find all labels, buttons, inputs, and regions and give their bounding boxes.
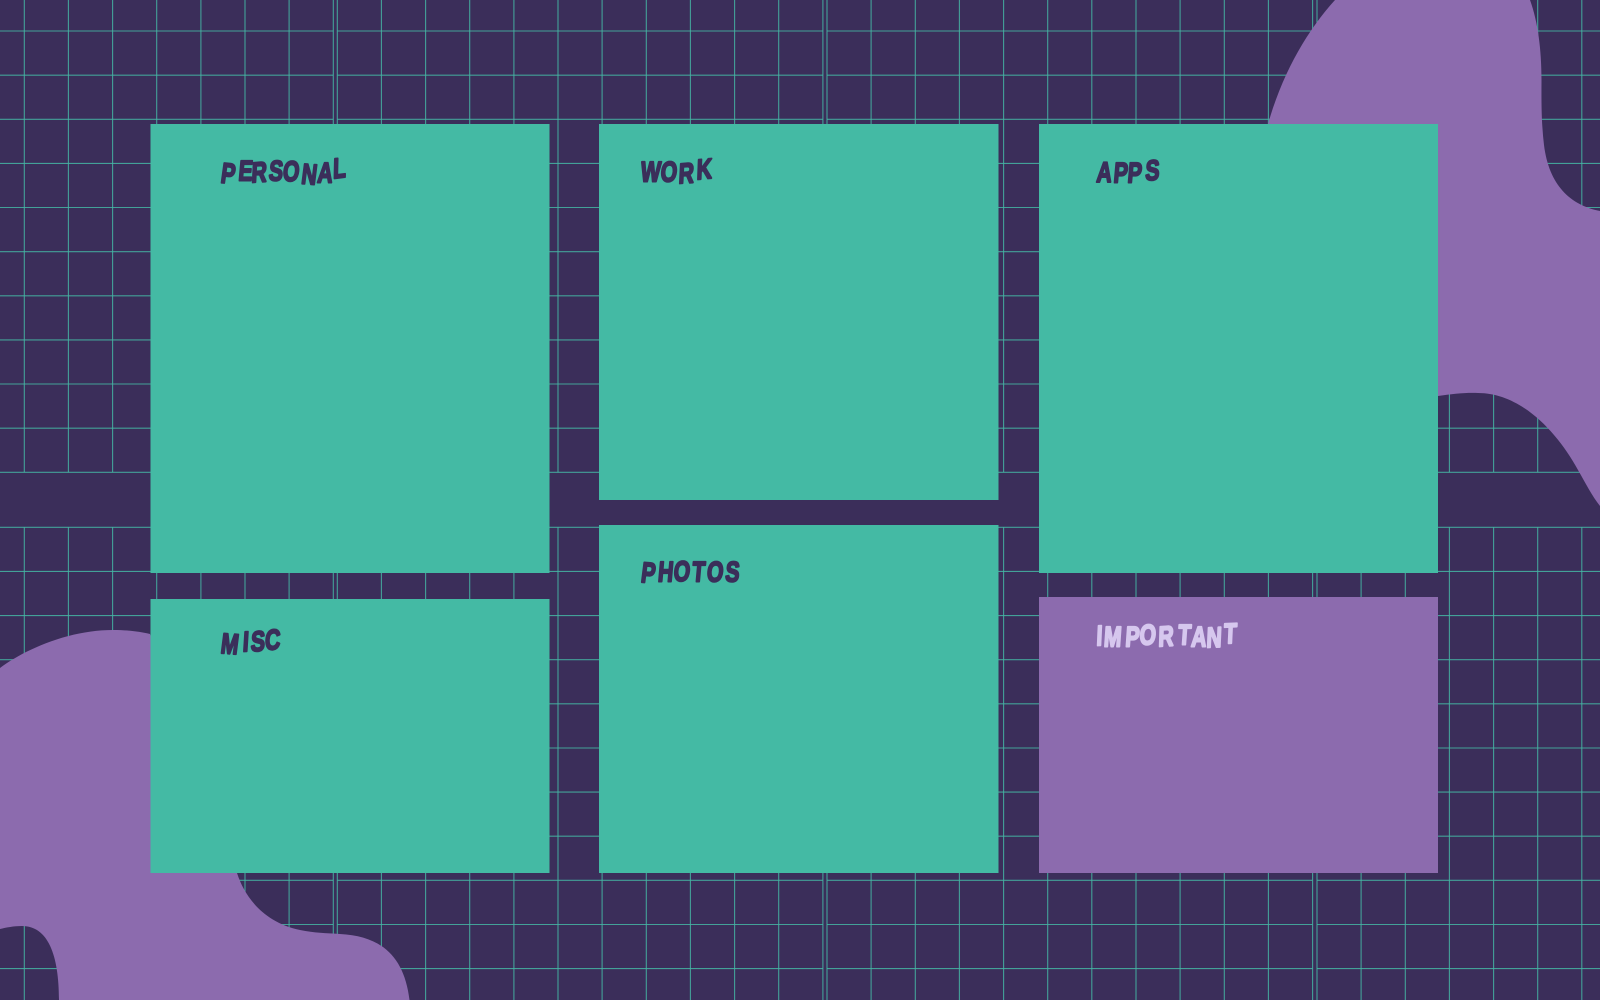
panel: photos	[599, 525, 998, 873]
heading: work: WORK	[639, 153, 714, 190]
heading: photos: PHOTOS	[639, 556, 741, 590]
blob: top right	[1268, 0, 1600, 506]
heading: apps: APPS	[1095, 155, 1162, 189]
panel: misc	[150, 599, 550, 873]
heading: personal: PERSONAL	[219, 152, 348, 191]
panel: important	[1039, 597, 1438, 873]
panel: apps	[1039, 124, 1438, 573]
panel: personal	[150, 124, 550, 573]
heading: important: IMPORTANT	[1095, 618, 1239, 654]
panel: work	[599, 124, 998, 500]
heading: misc: MISC	[219, 624, 282, 661]
blob: bottom left	[0, 630, 410, 1000]
